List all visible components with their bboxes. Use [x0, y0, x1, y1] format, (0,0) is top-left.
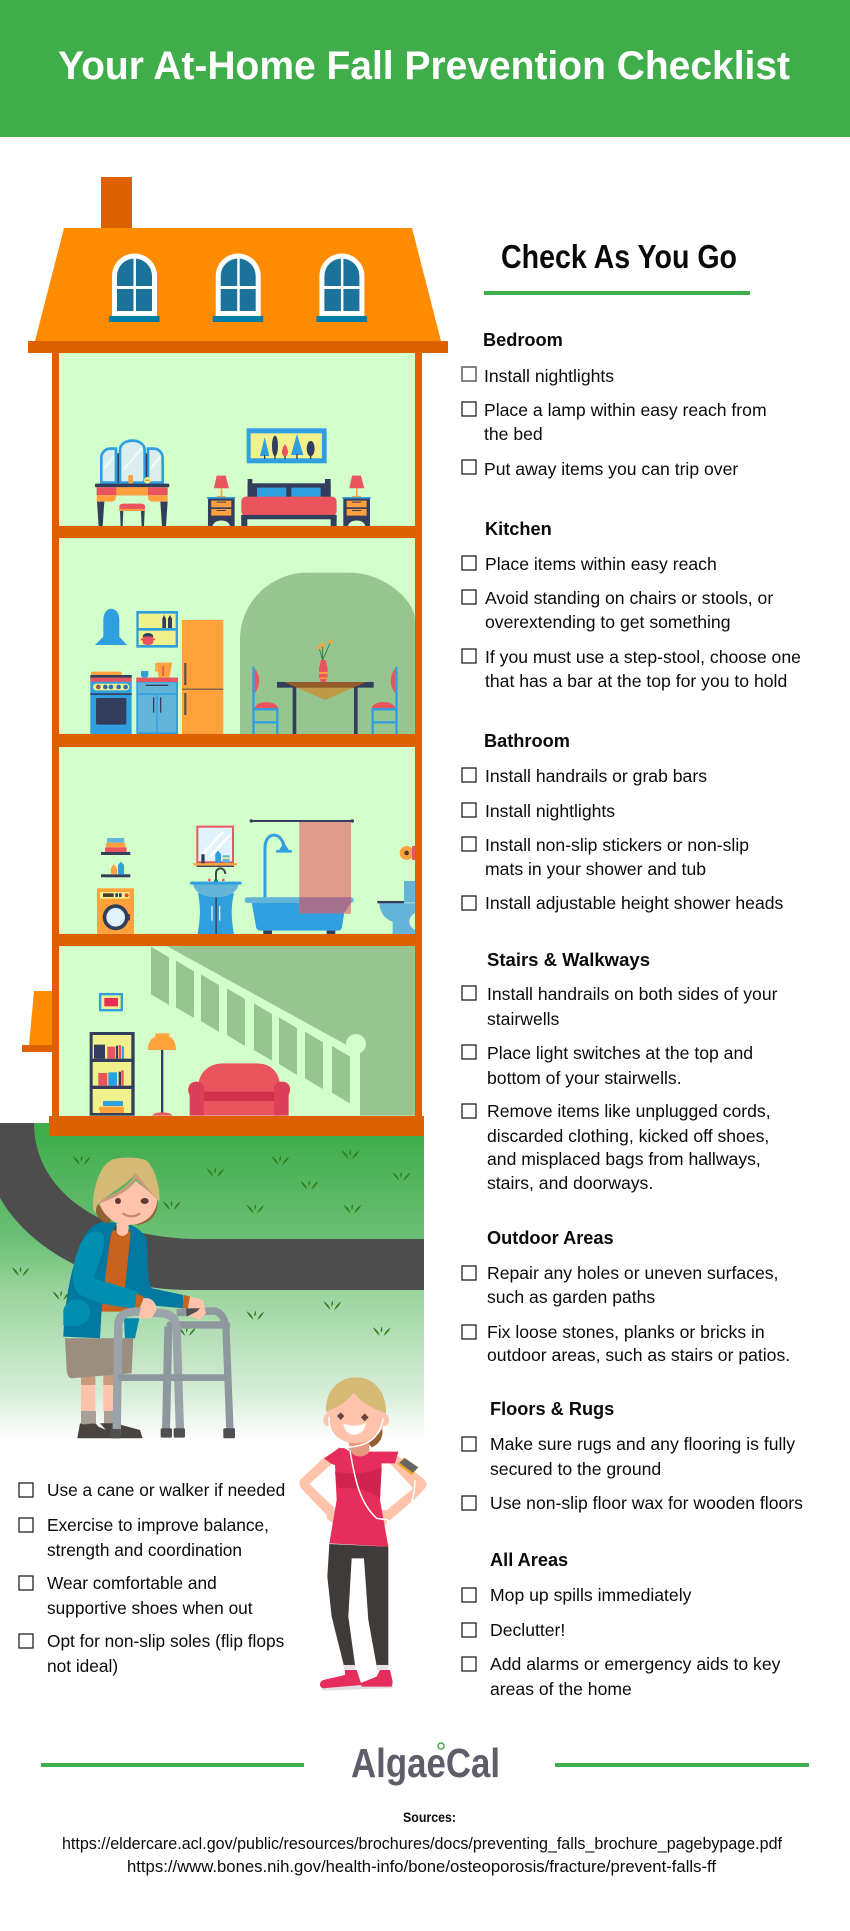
bookcase	[90, 1032, 135, 1116]
item	[462, 1322, 790, 1365]
item: mats in your shower and tub	[485, 859, 706, 879]
side awning	[22, 991, 52, 1052]
item: stairs, and doorways.	[487, 1173, 653, 1193]
item: Declutter!	[490, 1620, 565, 1640]
item: Repair any holes or uneven surfaces,	[487, 1263, 778, 1283]
item	[462, 588, 773, 632]
heading: Bedroom	[483, 330, 563, 350]
sink	[190, 868, 242, 934]
title banner	[0, 0, 850, 137]
sources	[62, 1809, 782, 1876]
ground with lawn and road	[0, 1123, 424, 1441]
dining chair left	[252, 667, 278, 734]
leggings	[327, 1544, 388, 1666]
head and hair	[93, 1158, 160, 1225]
fridge	[182, 620, 223, 734]
logo: AlgaeCal with divider lines: AlgaeCal	[351, 1740, 500, 1786]
item	[19, 1515, 269, 1560]
jacket	[63, 1221, 191, 1338]
bathtub and shower	[245, 819, 354, 934]
sources heading: Sources:	[403, 1809, 456, 1825]
item: Avoid standing on chairs or stools, or	[485, 588, 773, 608]
illustration: senior woman with walker	[63, 1158, 235, 1438]
item	[462, 1263, 778, 1307]
heading: Bathroom	[484, 731, 570, 751]
neck	[117, 1223, 128, 1236]
item: and misplaced bags from hallways,	[487, 1149, 761, 1169]
item: strength and coordination	[47, 1540, 242, 1560]
nightstand and lamp right	[342, 476, 371, 526]
heading: Stairs & Walkways	[487, 950, 650, 970]
checklist: bedroom	[462, 330, 767, 479]
item	[462, 1434, 795, 1479]
item: Remove items like unplugged cords,	[487, 1101, 771, 1121]
checklist: personal tips	[19, 1480, 285, 1676]
heading: Floors & Rugs	[490, 1399, 614, 1419]
checklist: outdoor areas	[462, 1228, 790, 1365]
road	[0, 1123, 424, 1290]
heading: Outdoor Areas	[487, 1228, 614, 1248]
legs	[77, 1375, 143, 1438]
toilet	[377, 881, 415, 934]
heading: Kitchen	[485, 519, 552, 539]
item: Install handrails on both sides of your	[487, 984, 778, 1004]
source link one: https://eldercare.acl.gov/public/resources/brochures/docs/preventing_falls_brochure_pagebypage.pdf	[62, 1834, 782, 1853]
heading: check as you go: Check As You Go	[501, 238, 737, 275]
bedroom furniture	[95, 428, 371, 526]
shirt	[324, 1447, 398, 1547]
roof	[35, 228, 441, 341]
small wall picture	[99, 993, 123, 1011]
item: that has a bar at the top for you to hold	[485, 671, 787, 691]
hands	[138, 1297, 206, 1320]
house illustration	[22, 177, 448, 1136]
item	[462, 1101, 771, 1193]
kitchen counter	[136, 663, 178, 734]
item: stairwells	[487, 1009, 560, 1029]
item: Place a lamp within easy reach from	[484, 400, 767, 420]
house frame walls and floors	[28, 341, 448, 1136]
attic window right	[316, 254, 367, 322]
nightstand and lamp left	[207, 476, 235, 526]
item: Add alarms or emergency aids to key	[490, 1654, 781, 1674]
item: Install nightlights	[484, 366, 614, 386]
checklist: all areas	[462, 1550, 781, 1699]
item: Make sure rugs and any flooring is fully	[490, 1434, 795, 1454]
attic window middle	[213, 254, 263, 322]
wall cupboard	[136, 611, 178, 648]
item: supportive shoes when out	[47, 1598, 253, 1618]
item: Install adjustable height shower heads	[485, 893, 784, 913]
laundry shelves	[101, 838, 130, 877]
washing machine	[97, 888, 134, 934]
attic window left	[109, 254, 160, 322]
item: bottom of your stairwells.	[487, 1068, 682, 1088]
item: Wear comfortable and	[47, 1573, 217, 1593]
stairwell and living room	[90, 946, 415, 1116]
item: the bed	[484, 424, 543, 444]
head	[323, 1377, 389, 1443]
heading: check as you go	[484, 238, 750, 295]
walker feet	[111, 1428, 235, 1438]
skirt	[65, 1338, 133, 1378]
item: secured to the ground	[490, 1459, 661, 1479]
neck	[348, 1440, 369, 1456]
heading: All Areas	[490, 1550, 568, 1570]
item: Place light switches at the top and	[487, 1043, 753, 1063]
dining room arch	[240, 573, 415, 734]
bathroom mirror	[193, 826, 237, 867]
item: Fix loose stones, planks or bricks in	[487, 1322, 765, 1342]
bed	[241, 479, 337, 526]
dining chair right	[372, 667, 398, 734]
grass tufts	[12, 1150, 410, 1336]
item: discarded clothing, kicked off shoes,	[487, 1126, 769, 1146]
item: Install non-slip stickers or non-slip	[485, 835, 749, 855]
item: Place items within easy reach	[485, 554, 717, 574]
checklist: floors and rugs	[462, 1399, 803, 1513]
item: Opt for non-slip soles (flip flops	[47, 1631, 285, 1651]
shoes	[320, 1665, 393, 1691]
floor lamp	[148, 1033, 176, 1116]
item: Install nightlights	[485, 801, 615, 821]
item	[19, 1573, 253, 1618]
item	[462, 984, 778, 1029]
vanity table	[95, 441, 169, 526]
blouse	[100, 1230, 137, 1312]
armband	[397, 1457, 418, 1475]
range hood	[95, 609, 127, 645]
item	[462, 1654, 781, 1699]
item: If you must use a step-stool, choose one	[485, 647, 801, 667]
far walker frame	[166, 1311, 230, 1432]
item: areas of the home	[490, 1679, 632, 1699]
logo: AlgaeCal with divider lines	[41, 1740, 809, 1786]
item	[462, 835, 749, 879]
item: Mop up spills immediately	[490, 1585, 692, 1605]
source link two: https://www.bones.nih.gov/health-info/bone/osteoporosis/fracture/prevent-falls-ff	[127, 1857, 716, 1876]
illustration: young woman exercising	[299, 1377, 427, 1691]
item	[462, 647, 801, 691]
item: outdoor areas, such as stairs or patios.	[487, 1345, 790, 1365]
dining table	[277, 640, 374, 734]
item: Install handrails or grab bars	[485, 766, 707, 786]
stove	[90, 672, 132, 734]
checklist: kitchen	[462, 519, 801, 691]
ponytail	[367, 1427, 382, 1447]
checklist: bathroom	[462, 731, 784, 913]
toilet paper	[400, 846, 415, 860]
arms	[299, 1453, 427, 1528]
rooms background	[59, 353, 415, 1118]
item: Put away items you can trip over	[484, 459, 738, 479]
item: Use non-slip floor wax for wooden floors	[490, 1493, 803, 1513]
kitchen and bathroom furniture	[90, 573, 415, 934]
near walker frame	[117, 1312, 227, 1433]
item: Use a cane or walker if needed	[47, 1480, 285, 1500]
item	[19, 1631, 285, 1676]
earphone cable	[329, 1417, 415, 1520]
title: Your At-Home Fall Prevention Checklist	[58, 44, 790, 88]
item: such as garden paths	[487, 1287, 655, 1307]
wall picture	[247, 428, 327, 463]
item	[462, 400, 767, 444]
checklist: stairs and walkways	[462, 950, 778, 1193]
sofa	[188, 1063, 290, 1116]
item: not ideal)	[47, 1656, 118, 1676]
item: overextending to get something	[485, 612, 730, 632]
stairs	[151, 946, 415, 1116]
item: Exercise to improve balance,	[47, 1515, 269, 1535]
item	[462, 1043, 753, 1088]
chimney	[101, 177, 132, 228]
